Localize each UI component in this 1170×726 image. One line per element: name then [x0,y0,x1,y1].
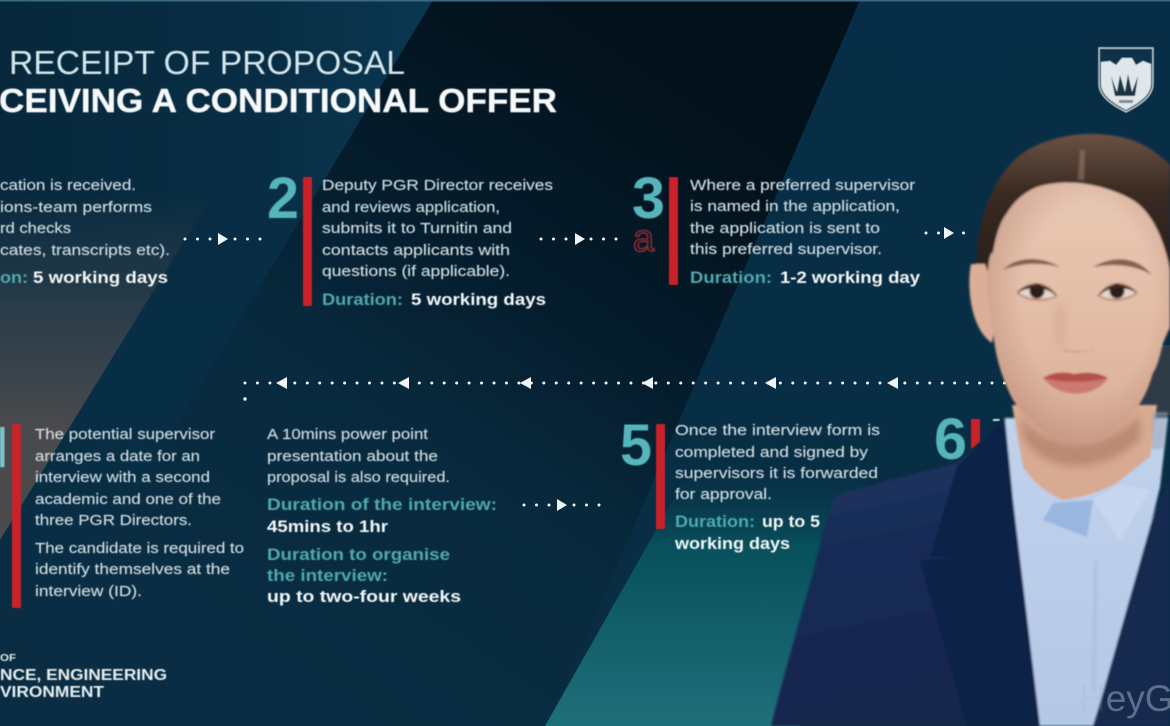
step 1: cation is received. [0,177,136,194]
step 5: working days [674,535,790,553]
title [0,44,557,119]
step 6: 6 [934,407,967,472]
step 3 [632,166,920,287]
step 2: 2 [267,166,299,231]
arrow: step 4 to 5 [524,499,603,511]
step 4 interview durations: Duration to organise [267,546,450,564]
upper lip [1043,373,1108,382]
step 3: the application is sent to [690,220,880,237]
step 6 [934,407,1000,472]
step 4 interview durations: presentation about the [267,448,438,465]
step 5: Duration: [675,513,755,531]
arrow: step 3 to next [926,227,975,239]
step 4 [0,415,244,608]
title: CEIVING A CONDITIONAL OFFER [0,82,557,119]
step 4 interview durations: A 10mins power point [267,426,429,443]
step 4: The candidate is required to [35,540,244,557]
step 1: rd checks [0,220,71,237]
step 3: Where a preferred supervisor [690,177,915,194]
presenter portrait [771,134,1170,726]
right eye [1097,283,1138,301]
step 4 interview durations: up to two-four weeks [267,588,461,606]
step 3: Duration: [690,269,772,287]
step 5: up to 5 [762,513,820,531]
footer faculty name: VIRONMENT [0,684,104,701]
step 2 [267,166,553,309]
shirt placket [1091,560,1098,690]
step 4 interview durations: the interview: [267,567,388,585]
step 3: this preferred supervisor. [690,241,882,258]
step 3: 1-2 working day [780,269,920,287]
step 5: completed and signed by [675,444,868,461]
nose [1058,347,1094,352]
step 4: The potential supervisor [35,426,215,443]
footer faculty name: OF [0,652,17,664]
step 2: Deputy PGR Director receives [322,177,553,194]
jacket [771,417,1060,726]
step 5: Once the interview form is [675,422,880,439]
step 2: 5 working days [411,291,546,309]
step 5: for approval. [675,486,772,503]
step 4 interview durations: proposal is also required. [267,469,450,486]
step 4: identify themselves at the [35,561,230,578]
arrow: long return connector [243,377,1005,401]
arrow: step 2 to 3 [541,233,622,245]
step 2: contacts applicants with [322,242,510,259]
step 4 interview durations: Duration of the interview: [267,496,497,514]
footer faculty name [0,652,167,701]
step 4: academic and one of the [35,491,221,508]
step 4: arranges a date for an [35,448,200,465]
ear [969,264,998,343]
right jacket lapel [1093,478,1170,726]
nose side shadow [1054,301,1066,349]
step 4: three PGR Directors. [35,512,192,529]
step 4 interview durations: 45mins to 1hr [267,518,389,536]
step 5: supervisors it is forwarded [675,465,878,482]
step 5: 5 [620,413,652,478]
hair [976,134,1170,330]
step 3: 3 [632,166,665,231]
face [987,183,1170,443]
step 5 [620,413,880,553]
shirt [1005,418,1168,726]
chin shadow [1020,415,1140,466]
jacket lapel [920,417,1040,726]
step 4: interview with a second [35,469,210,486]
lips [1043,373,1108,394]
step 2: questions (if applicable). [322,263,510,280]
collar top right [1152,412,1168,450]
step 1: on: [0,269,28,287]
neck [1012,405,1157,500]
step 1: 5 working days [33,269,168,287]
step 2: Duration: [322,291,403,309]
collar tips [1043,500,1093,537]
icon: university shield logo [1099,48,1153,112]
step 1: ions-team performs [0,199,152,216]
face edge shading [987,183,1170,443]
arrow: step 1 to 2 [185,233,265,245]
title: RECEIPT OF PROPOSAL [9,44,405,81]
step 3: is named in the application, [690,198,900,215]
step 2: and reviews application, [322,199,500,216]
step 4 interview durations [267,426,497,606]
left eye [1016,283,1058,301]
step 1: cates, transcripts etc). [0,242,170,259]
step 1 [0,177,170,287]
step 2: submits it to Turnitin and [322,220,512,237]
step 3: a [633,218,655,260]
step 4: interview (ID). [35,583,142,600]
brows [1003,259,1060,270]
footer faculty name: NCE, ENGINEERING [0,667,167,684]
hair parting [1078,150,1085,180]
